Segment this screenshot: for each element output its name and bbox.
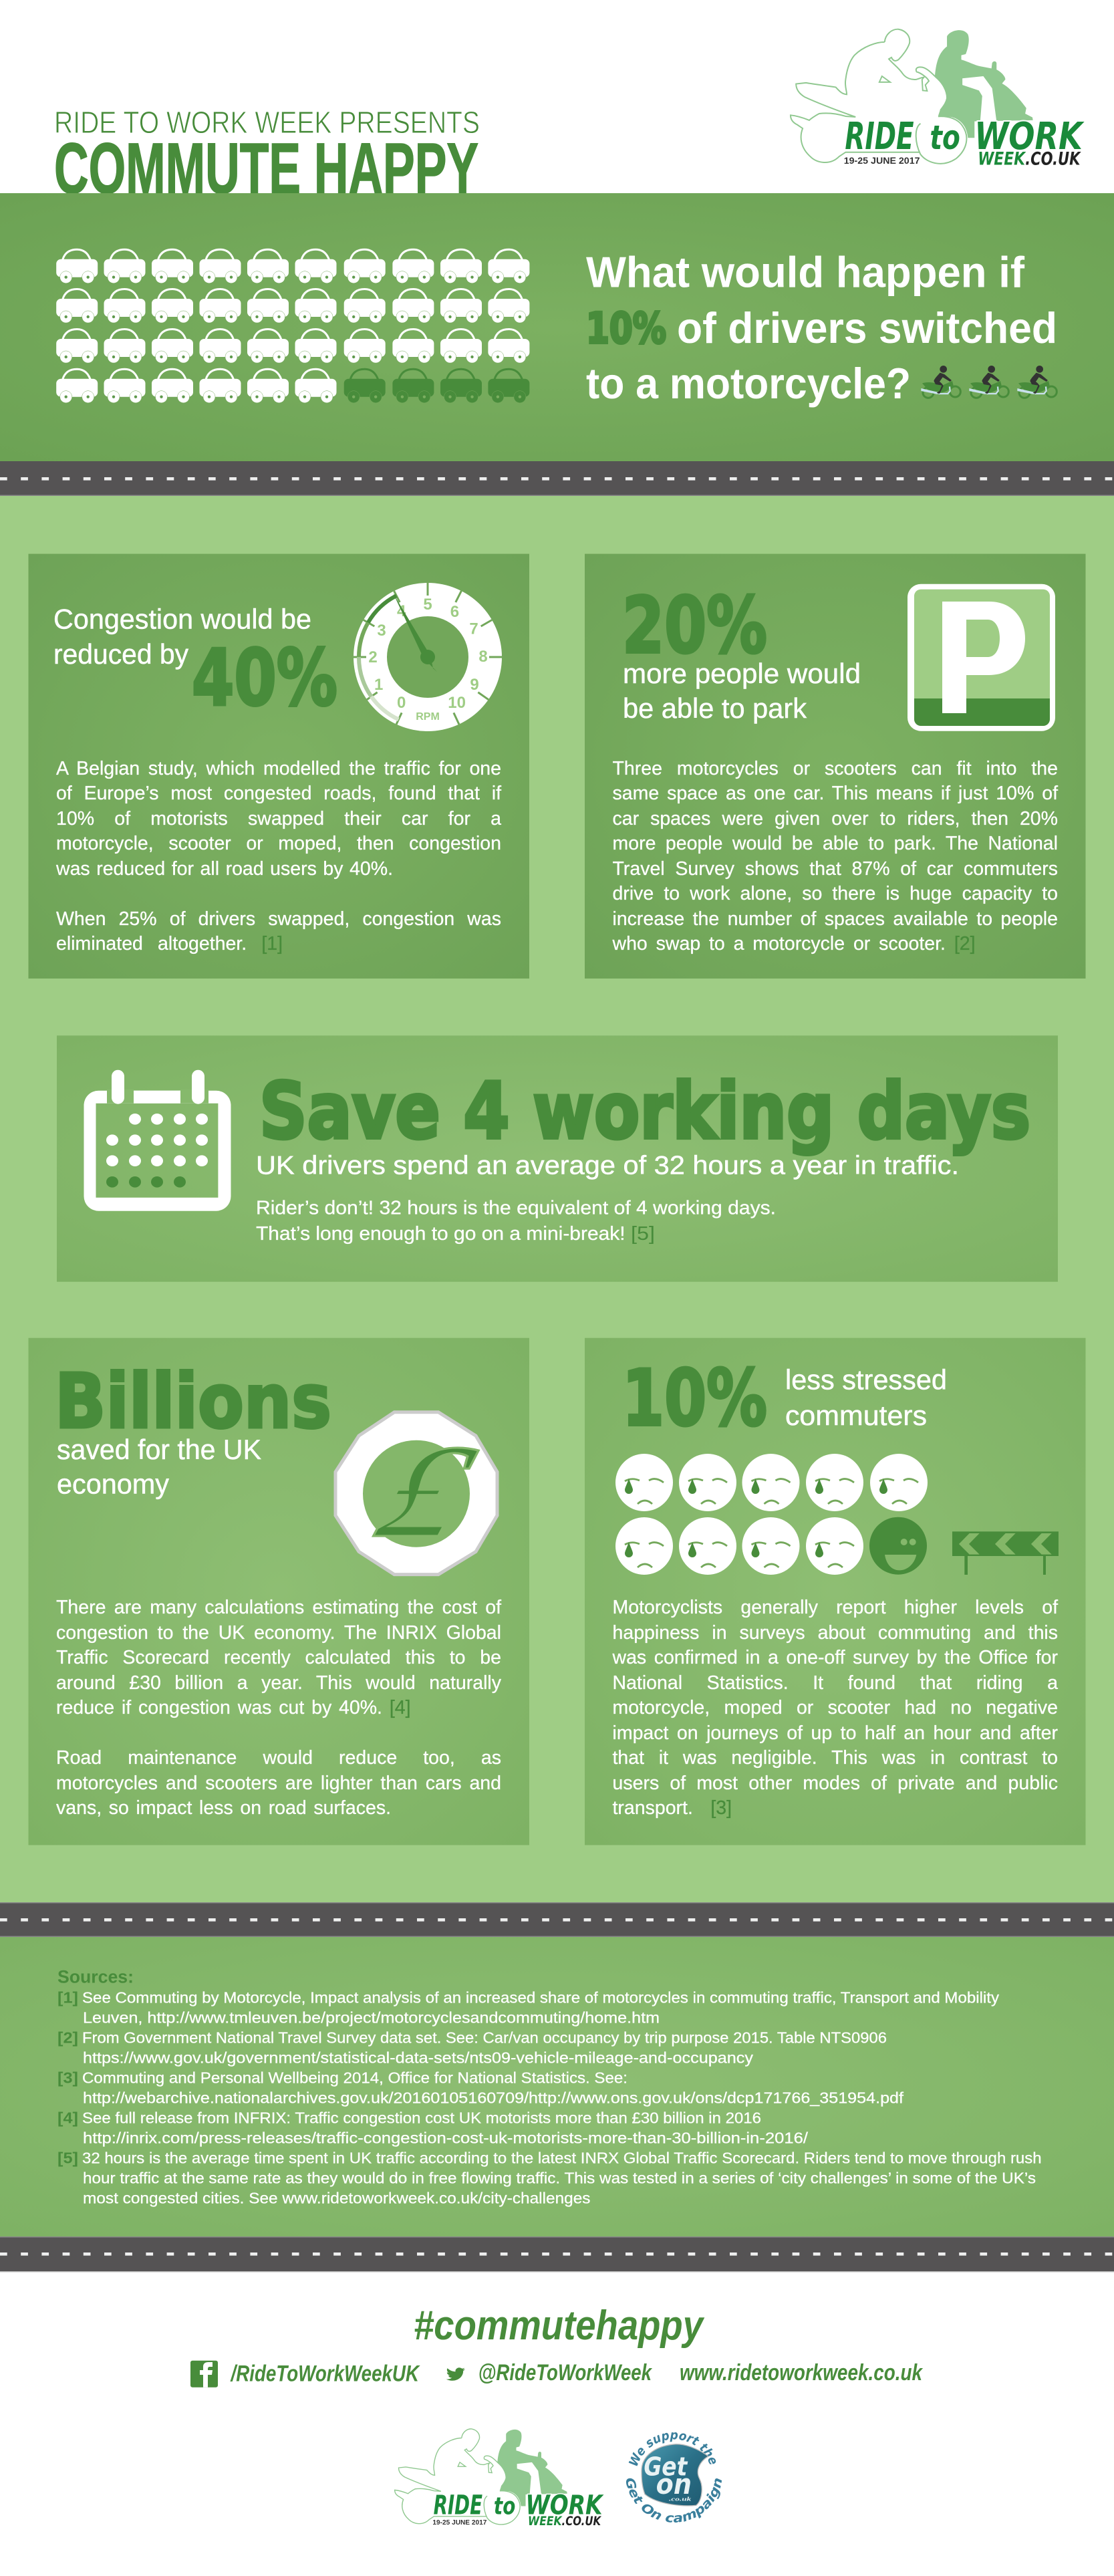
text: UK drivers spend: UK drivers spend an average of 32 hours a year in traffic. [256,1152,959,1180]
text: congestion paragraph: A Belgian study, which modelled the traffic for one [56,758,501,779]
logo: Ride to Work Week (top): to [930,118,960,157]
source 3: http://webarchive.nationalarchives.gov.uk/20160105160709/http://www.ons.gov.uk/ons/dcp171766_351954.pdf [83,2089,904,2106]
heading: 10% less stressed commuters: 10% [622,1354,767,1444]
icon: twitter [446,2367,465,2381]
twitter handle: @RideToWorkWeek [478,2360,653,2386]
text: riders don't: Rider’s don’t! 32 hours is the equivalent of 4 working days. [256,1198,776,1219]
heading: 20% more people would be able to park: be able to park [623,692,807,724]
hashtag: #commutehappy [414,2303,705,2349]
source 5 [57,2149,1042,2206]
logo: Ride to Work Week (bottom): to [494,2492,515,2520]
source 1 [57,1988,1000,2026]
text: stress paragraph: motorcycle, moped or scooter had no negative [612,1697,1058,1718]
text: billions paragraph: around £30 billion a year. This would naturally [56,1672,501,1694]
icon: rev counter gauge: 10 [448,694,466,712]
text: billions paragraph: congestion to the UK economy. The INRIX Global [56,1622,501,1643]
heading: 20% more people would be able to park: 20% [622,581,767,671]
icon: rev counter gauge: 4 [397,602,406,620]
source 4 [57,2109,809,2146]
text: stress paragraph: users of most other modes of private and public [612,1773,1058,1794]
icon: rev counter gauge: 6 [450,603,459,621]
logo: Ride to Work Week (bottom) [395,2429,604,2529]
text: parking paragraph: same space as one car. This means if just 10% of [612,783,1058,804]
icon: parking sign [908,584,1055,731]
road divider 1 [0,461,1114,496]
text: stress paragraph: impact on journeys of up to half an hour and after [612,1722,1058,1743]
logo: Ride to Work Week (bottom): .CO.UK [562,2515,601,2529]
text: parking paragraph: car spaces were given over to riders, then 20% [612,807,1058,829]
source 4: http://inrix.com/press-releases/traffic-congestion-cost-uk-motorists-more-than-30-billion-in-2016/ [83,2129,809,2146]
panel: congestion [28,554,529,979]
text: stress paragraph: transport. [3] [612,1797,732,1819]
logo: Ride to Work Week (top): .CO.UK [1025,150,1082,170]
heading: what would happen if [586,248,1057,408]
text: stress paragraph: was confirmed in a one-off survey by the Office for [612,1647,1058,1668]
source 3: Commuting and Personal Wellbeing 2014, Office for National Statistics. See: [82,2069,628,2086]
website: www.ridetoworkweek.co.uk [680,2360,924,2386]
source 3: [3] [57,2069,78,2086]
text: congestion paragraph [56,758,501,954]
text: billions paragraph: There are many calculations estimating the cost of [56,1597,501,1618]
panel: top banner [0,193,1114,461]
logo: Ride to Work Week (top): WEEK [978,150,1026,170]
heading: billions saved for the UK economy: Billions [55,1359,331,1446]
panel: sources [0,1937,1114,2236]
logo: Get On campaign: .co.uk [669,2496,691,2502]
panel: less stressed [585,1338,1085,1845]
source 3 [57,2069,904,2106]
text: billions paragraph: reduce if congestion was cut by 40%. [4] [56,1697,410,1718]
icon: rev counter gauge: 2 [368,648,378,666]
panel: save 4 working days [57,1035,1058,1282]
text: parking paragraph: more people would be able to park. The National [612,833,1058,854]
heading: what would happen if: of drivers switched [677,303,1057,352]
icon: pound coin: £ [362,1418,490,1565]
icon: rev counter gauge: 8 [478,648,488,666]
icon: rev counter gauge: 7 [469,620,478,638]
text: congestion paragraph: was reduced for all road users by 40%. [56,858,393,880]
heading: congestion would be reduced by 40%: reduced by [53,638,188,670]
text: parking paragraph: Travel Survey shows that 87% of car commuters [612,858,1058,880]
logo: Ride to Work Week (bottom): RIDE [434,2490,482,2521]
logo: Get On campaign: Get [644,2452,688,2482]
heading: billions saved for the UK economy: saved for the UK [57,1434,261,1465]
logo: Ride to Work Week (top): 19-25 JUNE 2017 [844,155,920,166]
panel: billions saved [28,1338,529,1845]
source 5: hour traffic at the same rate as they would do in free flowing traffic. This was tested in a series of ‘city challenges’ in some of the UK’s [83,2169,1036,2186]
icon: rev counter gauge: 1 [374,676,383,694]
text: congestion paragraph: eliminated altogether. [1] [56,933,283,954]
text: billions paragraph: vans, so impact less on road surfaces. [56,1797,391,1819]
text: riders don't: That’s long enough to go on a mini-break! [256,1223,625,1245]
text: riders don't: [5] [631,1223,655,1245]
logo: Ride to Work Week (bottom): WORK [526,2490,604,2521]
text: congestion paragraph: of Europe’s most congested roads, found that if [56,783,501,804]
icon: three motorcycles [921,366,1057,398]
logo: Get On campaign [625,2432,722,2523]
source 5: 32 hours is the average time spent in UK traffic according to the latest INRX Global Traffic Scorecard. Riders tend to move through rush [82,2149,1042,2166]
source 2: [2] [57,2029,78,2046]
icon: nine sad faces and one happy [615,1454,928,1575]
text: stress paragraph: National Statistics. It found that riding a [612,1672,1058,1694]
text: stress paragraph [612,1597,1059,1819]
logo: Ride to Work Week (bottom): WEEK [528,2515,563,2529]
heading: sources: Sources: [57,1966,134,1986]
logo: Get On campaign: We support the [628,2432,716,2466]
source 5: [5] [57,2149,78,2166]
heading: 20% more people would be able to park: more people would [623,658,861,689]
source 4: See full release from INFRIX: Traffic congestion cost UK motorists more than £30 billion in 2016 [82,2109,761,2126]
source 2: https://www.gov.uk/government/statistical-data-sets/nts09-vehicle-mileage-and-occupancy [83,2049,754,2066]
text: stress paragraph: that it was negligible. This was in contrast to [612,1747,1058,1769]
logo: Ride to Work Week (top): RIDE [845,115,914,158]
text: parking paragraph: drive to work alone, so there is huge capacity to [612,883,1058,904]
panel: parking [585,554,1085,979]
text: parking paragraph [612,758,1059,954]
icon: chevron road sign [952,1531,1059,1575]
text: stress paragraph: Motorcyclists generally report higher levels of [612,1597,1058,1618]
title: Commute Happy: COMMUTE HAPPY [54,128,478,209]
text: billions paragraph [56,1597,501,1819]
text: parking paragraph: who swap to a motorcycle or scooter. [2] [612,933,976,954]
heading: congestion would be reduced by 40%: Congestion would be [53,604,311,635]
icon: rev counter gauge: 9 [470,676,479,694]
logo: Ride to Work Week (top): WORK [974,115,1085,158]
text: billions paragraph: Traffic Scorecard recently calculated this to be [56,1647,501,1668]
panel: light green background [0,496,1114,1902]
text: congestion paragraph: motorcycle, scooter or moped, then congestion [56,833,501,854]
text: congestion paragraph: 10% of motorists swapped their car for a [56,807,501,829]
icon: rev counter gauge [354,583,502,731]
icon: calendar [84,1070,231,1211]
text: riders don't [256,1198,776,1245]
source 5: most congested cities. See www.ridetoworkweek.co.uk/city-challenges [83,2189,591,2206]
source 2 [57,2029,887,2066]
source 1: See Commuting by Motorcycle, Impact analysis of an increased share of motorcycles in commuting traffic, Transport and Mobility [82,1988,1000,2006]
icon: rev counter gauge: RPM [416,711,440,723]
logo: Ride to Work Week (top) [791,29,1085,170]
logo: Ride to Work Week (bottom): 19-25 JUNE 2017 [432,2519,487,2527]
heading: what would happen if: to a motorcycle? [586,359,911,408]
text: billions paragraph: motorcycles and scooters are lighter than cars and [56,1773,501,1794]
heading: 10% less stressed commuters: commuters [785,1400,927,1431]
road divider 2 [0,1902,1114,1937]
logo: Get On campaign: Get On campaign [625,2478,722,2523]
text: billions paragraph: Road maintenance would reduce too, as [56,1747,501,1769]
text: stress paragraph: happiness in surveys about commuting and this [612,1622,1058,1643]
heading: 10% less stressed commuters [622,1354,947,1444]
heading: billions saved for the UK economy [55,1359,331,1500]
heading: congestion would be reduced by 40%: 40% [192,634,337,723]
heading: 20% more people would be able to park [622,581,861,724]
icon: facebook [190,2361,218,2388]
text: parking paragraph: Three motorcycles or scooters can fit into the [612,758,1058,779]
road divider 3 [0,2236,1114,2273]
source 2: From Government National Travel Survey data set. See: Car/van occupancy by trip purpose 2015. Table NTS0906 [82,2029,887,2046]
pictogram: forty cars with four highlighted [56,249,529,403]
icon: rev counter gauge: 5 [423,596,432,614]
heading: 10% less stressed commuters: less stressed [785,1364,947,1396]
text: congestion paragraph: When 25% of drivers swapped, congestion was [56,908,501,929]
source 1: [1] [57,1988,78,2006]
heading: what would happen if: 10% [586,304,666,353]
heading: billions saved for the UK economy: economy [57,1468,169,1500]
facebook handle: /RideToWorkWeekUK [230,2361,420,2387]
text: parking paragraph: increase the number of spaces available to people [612,908,1058,929]
source 4: [4] [57,2109,78,2126]
heading: congestion would be reduced by 40% [53,604,337,723]
icon: rev counter gauge: 3 [377,622,386,640]
logo: Get On campaign: on [656,2468,692,2500]
heading: what would happen if: What would happen if [586,248,1024,297]
subtitle: Ride to Work Week presents: RIDE TO WORK WEEK PRESENTS [54,105,480,140]
icon: rev counter gauge: 0 [397,694,406,712]
source 1: Leuven, http://www.tmleuven.be/project/motorcyclesandcommuting/home.htm [83,2009,660,2026]
